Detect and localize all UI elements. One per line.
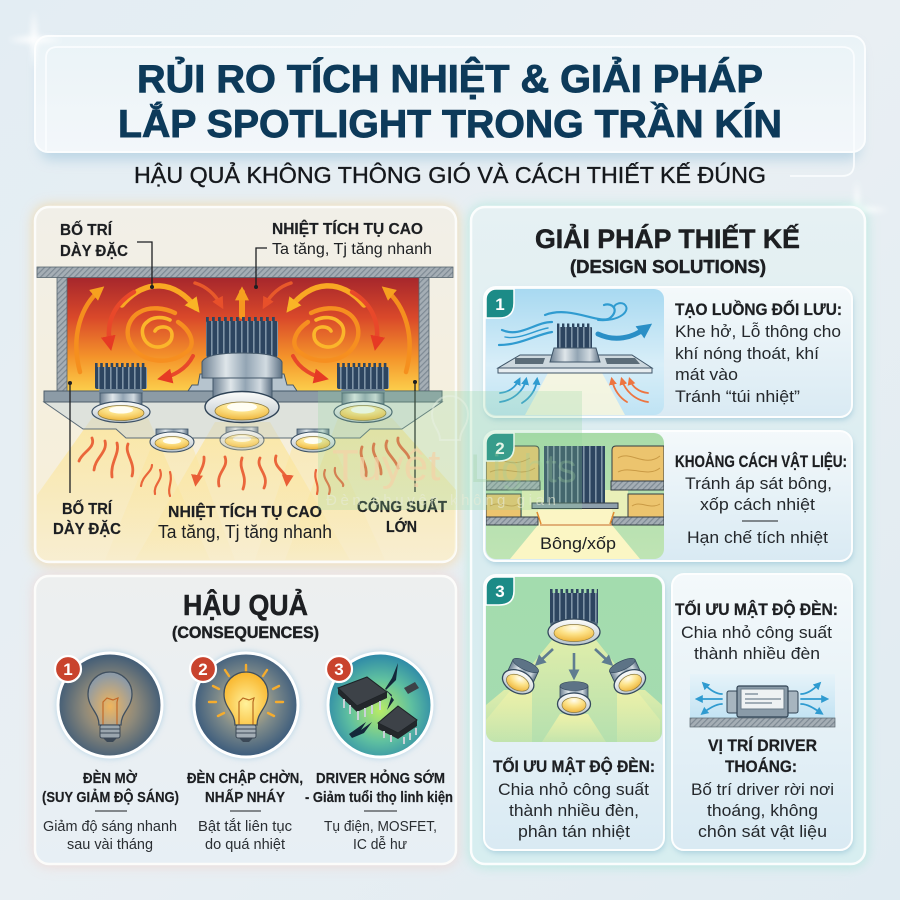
label: bố trí dày đặc (top) (60, 219, 128, 260)
text: consequence 3: Tụ điện, MOSFET, (324, 819, 437, 835)
badge 1 (486, 289, 514, 318)
heat swirls and arrows (76, 283, 410, 378)
label: bố trí dày đặc (bottom): DÀY ĐẶC (53, 519, 121, 538)
text: consequence 2: Bật tắt liên tục (198, 818, 292, 835)
label: nhiệt tích tụ cao (top) (272, 219, 432, 258)
badge 1: 1 (63, 660, 73, 679)
text: consequence 1: sau vài tháng (67, 837, 153, 853)
text: consequence 2: do quá nhiệt (205, 837, 285, 853)
text: solution 1 (675, 299, 842, 406)
text: solution 2: Tránh áp sát bông, (685, 474, 832, 493)
text: solution 1: TẠO LUỒNG ĐỐI LƯU: (675, 299, 842, 319)
text: consequence 1 (42, 769, 179, 853)
text: consequence 1: ĐÈN MỜ (83, 769, 137, 787)
label: bố trí dày đặc (bottom) (53, 498, 121, 538)
badge 2: 2 (198, 660, 208, 679)
panel: heat accumulation (33, 205, 458, 565)
text: consequence 2: ĐÈN CHẬP CHỜN, (187, 769, 303, 787)
label: công suất lớn: CÔNG SUẤT (357, 497, 447, 516)
text: solution 2 (675, 452, 847, 547)
text: driver (691, 736, 834, 841)
text: consequence 2: NHẤP NHÁY (205, 789, 285, 806)
leader line: top middle (254, 248, 267, 289)
text: consequence 1: Giảm độ sáng nhanh (43, 819, 177, 835)
icon: damaged chips (326, 651, 434, 759)
text: consequence 3: DRIVER HỎNG SỚM (316, 769, 445, 787)
light cones (37, 418, 456, 560)
illustration: driver (690, 674, 835, 727)
text: solution 2: Hạn chế tích nhiệt (687, 528, 828, 547)
label: công suất lớn (357, 497, 447, 536)
text: solution 3: phân tán nhiệt (518, 822, 630, 841)
text: density (675, 599, 838, 663)
card: solution 1 (484, 287, 853, 420)
lamp left (92, 366, 150, 422)
sub-heading: consequences: (CONSEQUENCES) (172, 623, 319, 642)
text: consequence 2 (187, 769, 303, 853)
label: bố trí dày đặc (top): BỐ TRÍ (60, 219, 113, 239)
sub-heading: design solutions: (DESIGN SOLUTIONS) (570, 257, 766, 277)
label: nhiệt tích tụ cao (bottom): Ta tăng, Tj tăng nhanh (158, 522, 332, 542)
illustration: convection (486, 289, 664, 415)
text: driver: thoáng, không (707, 801, 818, 820)
label: bố trí dày đặc (top): DÀY ĐẶC (60, 241, 128, 260)
small lamps (150, 429, 194, 452)
badge 3: 3 (334, 660, 344, 679)
watermark: Lights (470, 447, 577, 491)
icon: flickering bulb (192, 651, 300, 759)
leader line: bottom right (413, 380, 417, 492)
heading: giải pháp thiết kế: GIẢI PHÁP THIẾT KẾ (535, 222, 800, 254)
text: solution 3: TỐI ƯU MẬT ĐỘ ĐÈN: (493, 756, 655, 776)
illustration: lamp density (486, 577, 662, 742)
title line 2: LẮP SPOTLIGHT TRONG TRẦN KÍN (118, 102, 782, 146)
text: consequence 3: - Giảm tuổi thọ linh kiện (305, 789, 453, 806)
card: solution 2 (484, 431, 853, 564)
icon: dim bulb (56, 651, 164, 759)
lamp centre (188, 320, 297, 422)
text: consequence 3: IC dễ hư (353, 836, 407, 853)
lower ceiling panel (44, 391, 442, 438)
badge 3: 3 (495, 582, 505, 601)
label: nhiệt tích tụ cao (top): Ta tăng, Tj tăng nhanh (272, 241, 432, 258)
text: solution 1: khí nóng thoát, khí (675, 344, 819, 363)
text: driver: THOÁNG: (725, 757, 797, 776)
watermark: Tuyệt (332, 441, 440, 490)
sparkle: top left (8, 10, 62, 70)
badge 1: 1 (495, 295, 505, 314)
text: solution 2: KHOẢNG CÁCH VẬT LIỆU: (675, 452, 847, 471)
text: driver: VỊ TRÍ DRIVER (708, 736, 817, 755)
label: bố trí dày đặc (bottom): BỐ TRÍ (62, 498, 113, 518)
illustration: material clearance (486, 433, 664, 559)
leader line: top left (137, 242, 154, 289)
card: driver placement (672, 574, 853, 853)
text: driver: Bố trí driver rời nơi (691, 780, 834, 799)
leader line: bottom left (68, 381, 72, 493)
label: nhiệt tích tụ cao (bottom) (158, 502, 332, 542)
text: consequence 1: (SUY GIẢM ĐỘ SÁNG) (42, 788, 179, 806)
label: nhiệt tích tụ cao (bottom): NHIỆT TÍCH TỤ CAO (168, 502, 322, 521)
text: density: thành nhiều đèn (694, 644, 820, 663)
label: bông xốp: Bông/xốp (540, 534, 616, 553)
sparkle: right (828, 180, 888, 240)
ceiling and cavity (37, 267, 453, 392)
text: solution 1: Khe hở, Lỗ thông cho (675, 322, 841, 341)
spotlights (92, 320, 392, 452)
text: solution 3: Chia nhỏ công suất (498, 780, 649, 799)
text: density: Chia nhỏ công suất (681, 623, 832, 642)
text: solution 2: xốp cách nhiệt (700, 495, 815, 514)
badge 3 (326, 656, 352, 682)
text: solution 3: thành nhiều đèn, (509, 801, 639, 820)
badge 2 (190, 656, 216, 682)
watermark: Đèn chuyên không gian (326, 492, 556, 509)
badge 2 (486, 433, 514, 461)
label: công suất lớn: LỚN (386, 517, 417, 536)
text: solution 1: Tránh “túi nhiệt” (675, 387, 800, 406)
panel: consequences (33, 574, 458, 867)
badge 2: 2 (495, 439, 505, 458)
card: solution 3 (484, 575, 665, 853)
badge 1 (55, 656, 81, 682)
text: density: TỐI ƯU MẬT ĐỘ ĐÈN: (675, 599, 838, 619)
subtitle: HẬU QUẢ KHÔNG THÔNG GIÓ VÀ CÁCH THIẾT KẾ ĐÚNG (134, 160, 766, 188)
text: solution 3 (493, 756, 655, 841)
text: solution 1: mát vào (675, 365, 738, 384)
panel: design solutions (469, 205, 867, 867)
title panel (35, 36, 865, 176)
label: nhiệt tích tụ cao (top): NHIỆT TÍCH TỤ CAO (272, 219, 423, 238)
text: driver: chôn sát vật liệu (698, 822, 827, 841)
lamp right (334, 366, 392, 422)
text: consequence 3 (305, 769, 453, 853)
heat waves (79, 438, 409, 496)
heading: hậu quả: HẬU QUẢ (183, 588, 308, 622)
watermark (318, 391, 582, 510)
badge 3 (486, 577, 514, 605)
title line 1: RỦI RO TÍCH NHIỆT & GIẢI PHÁP (137, 57, 763, 101)
